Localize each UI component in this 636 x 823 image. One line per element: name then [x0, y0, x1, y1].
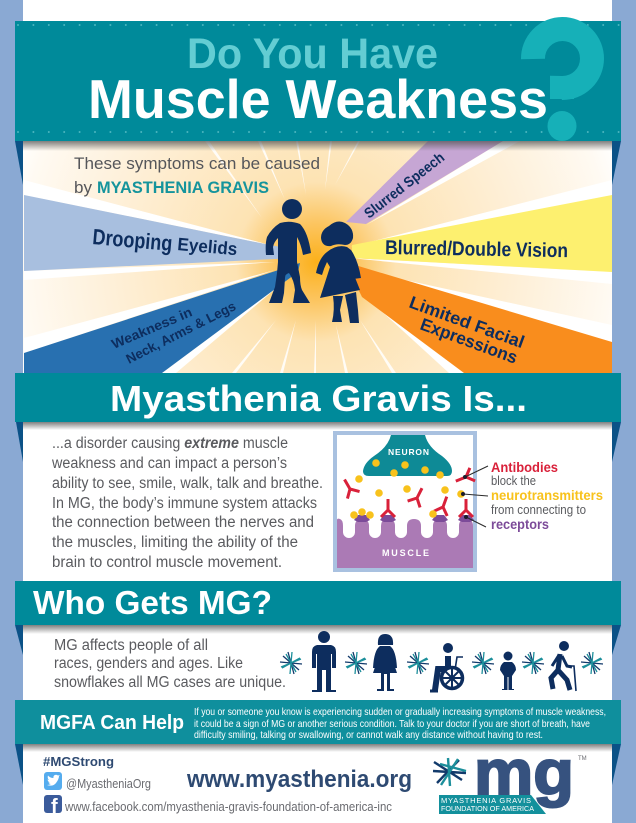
icon: wheelchair user — [430, 643, 463, 691]
receptors — [354, 515, 474, 522]
label: weakness: Neck, Arms & Legs — [124, 298, 238, 367]
logo star — [433, 758, 466, 786]
text: intro: These symptoms can be caused — [74, 154, 320, 173]
neuron: NEURON — [388, 447, 429, 457]
text: intro — [74, 154, 320, 197]
panel: symptoms sunburst — [23, 141, 612, 373]
text: who gets mg paragraph: races, genders and ages. Like — [54, 655, 243, 672]
callout: antibodies legend — [461, 459, 603, 532]
banner: mgfa can help — [15, 700, 621, 744]
banner: myasthenia gravis is: Myasthenia Gravis Is... — [110, 378, 527, 419]
icon: man figure — [266, 199, 311, 303]
muscle — [337, 519, 473, 568]
ray: limited facial expressions — [345, 262, 612, 373]
banner: who gets mg: Who Gets MG? — [33, 584, 272, 621]
text: hashtag: #MGStrong — [43, 754, 114, 769]
callout: antibodies legend: from connecting to — [491, 502, 586, 517]
text: intro: MYASTHENIA GRAVIS — [97, 178, 269, 197]
neurotransmitters — [355, 459, 465, 498]
label: slurred speech: Slurred Speech — [362, 150, 448, 222]
icon: woman figure — [316, 222, 361, 323]
callout: antibodies legend: block the — [491, 473, 536, 488]
banner: mgfa can help: MGFA Can Help — [40, 712, 184, 734]
icon: child — [500, 652, 516, 690]
callout: antibodies legend: neurotransmitters — [491, 487, 603, 503]
antibodies — [338, 468, 475, 517]
text: who gets mg paragraph — [54, 637, 286, 691]
muscle: MUSCLE — [382, 548, 429, 558]
icon: woman — [373, 634, 397, 691]
logo name box: FOUNDATION OF AMERICA — [441, 804, 534, 813]
neuron — [363, 435, 452, 476]
label: drooping eyelids: Eyelids — [177, 234, 238, 259]
label: drooping eyelids: Drooping — [92, 224, 173, 256]
icon: twitter — [44, 772, 62, 790]
text: definition paragraph: weakness and can impact a person’s — [51, 455, 287, 472]
text: definition paragraph: ...a disorder causing extreme muscle — [52, 435, 288, 452]
banner: myasthenia gravis is — [15, 373, 621, 422]
logo name box — [439, 795, 546, 814]
icon: facebook: f — [51, 796, 58, 818]
icon: question mark — [533, 29, 592, 141]
text: definition paragraph: In MG, the body’s immune system attacks — [52, 495, 317, 512]
heading: do you have: Do You Have — [187, 30, 438, 78]
banner: mgfa can help: difficulty smiling, talking or swallowing, or cannot walk any distance without having to rest. — [194, 729, 543, 741]
ray: drooping eyelids — [24, 195, 297, 271]
dark ribbon folds — [15, 141, 621, 785]
icon: man — [312, 631, 336, 692]
icon: facebook — [44, 795, 62, 818]
text: website: www.myasthenia.org — [186, 766, 412, 793]
label: weakness: Weakness in — [109, 304, 194, 352]
callout: antibodies legend: Antibodies — [491, 459, 558, 475]
heading: muscle weakness: Muscle Weakness — [88, 68, 548, 130]
label: blurred vision: Blurred/Double Vision — [385, 237, 568, 262]
label: limited facial expressions: Limited Facial — [407, 292, 527, 352]
ray: weakness — [24, 263, 300, 373]
text: definition paragraph: the muscles, limiting the ability of the — [52, 534, 298, 551]
snowflakes — [280, 652, 603, 674]
ray: blurred vision — [352, 195, 612, 272]
icon: elderly person with cane — [551, 641, 576, 691]
text: definition paragraph: the connection between the nerves and — [52, 514, 314, 531]
trademark: TM — [578, 756, 587, 762]
text: twitter handle: @MyastheniaOrg — [66, 777, 151, 791]
logo: mg — [433, 738, 587, 814]
text: who gets mg paragraph: MG affects people of all — [54, 637, 208, 654]
text: definition paragraph — [51, 435, 323, 571]
logo letters: mg — [474, 738, 574, 808]
banner shadows — [23, 141, 612, 752]
ray: slurred speech — [346, 141, 503, 224]
logo name box: MYASTHENIA GRAVIS — [441, 796, 531, 805]
text: who gets mg paragraph: snowflakes all MG cases are unique. — [54, 674, 286, 691]
text: facebook url: www.facebook.com/myasthenia-gravis-foundation-of-america-inc — [64, 800, 392, 814]
banner: who gets mg — [15, 581, 621, 625]
bound neurotransmitters — [350, 508, 437, 519]
text: intro: by — [74, 178, 92, 197]
text: definition paragraph: brain to control muscle movement. — [52, 554, 282, 571]
label: drooping eyelids — [92, 224, 238, 259]
label: limited facial expressions: Expressions — [418, 314, 521, 368]
diagram: synapse — [335, 433, 475, 570]
banner: title — [15, 21, 621, 141]
callout: antibodies legend: receptors — [491, 516, 549, 532]
text: definition paragraph: ability to see, smile, walk, talk and breathe. — [52, 475, 323, 492]
